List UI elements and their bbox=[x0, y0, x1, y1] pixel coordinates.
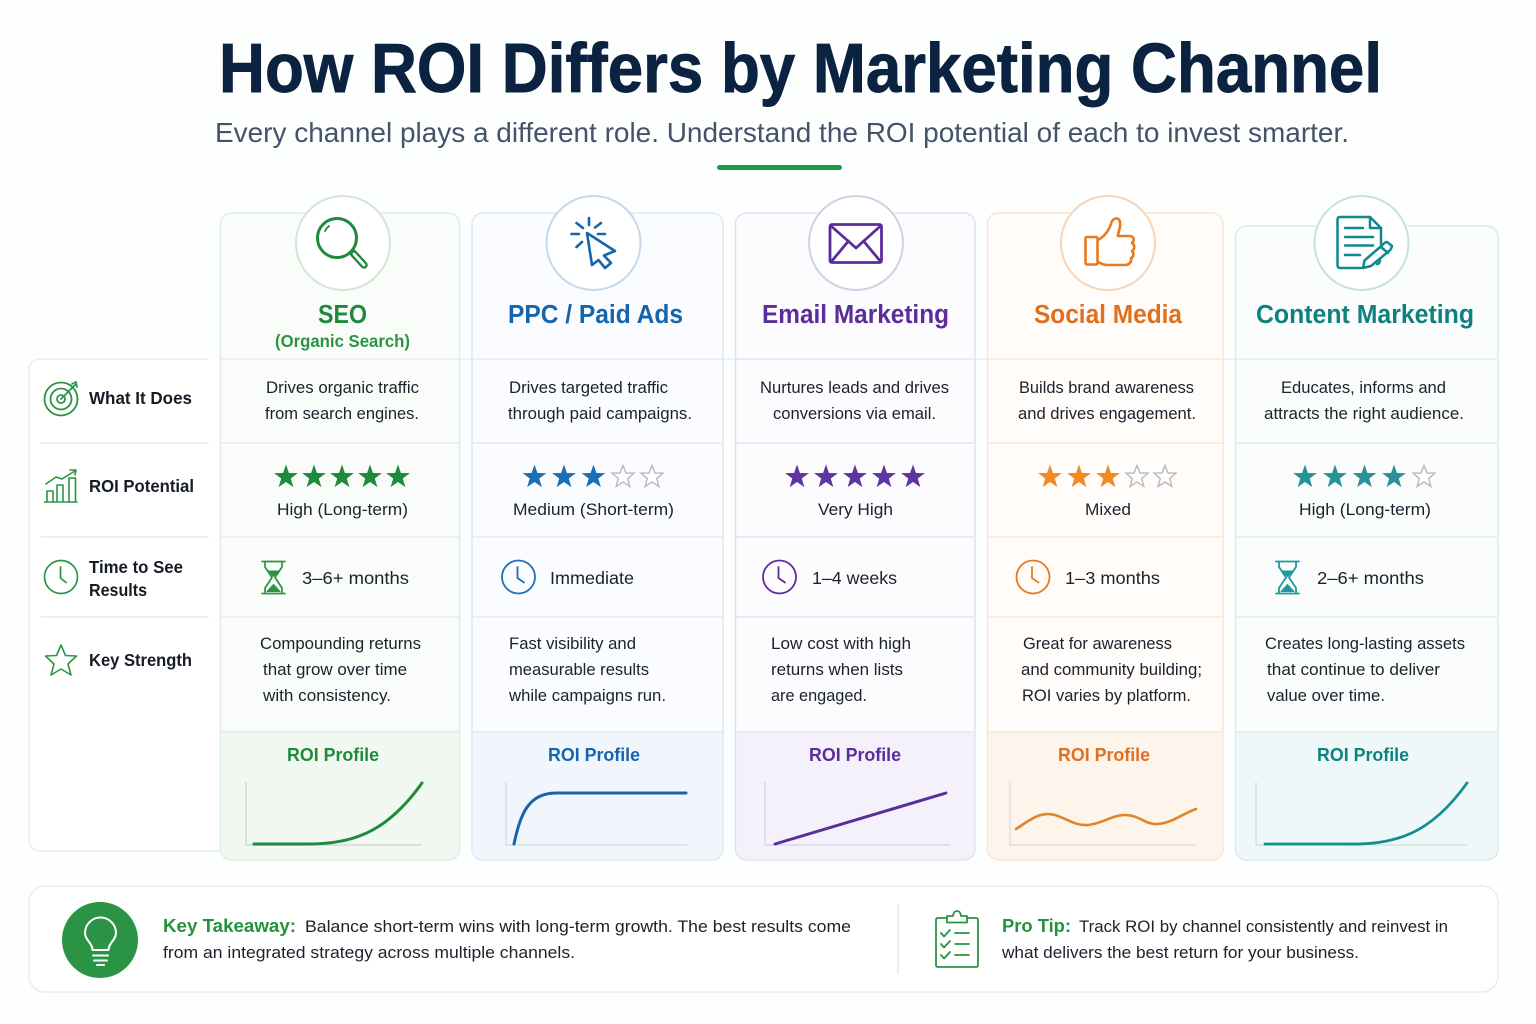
text: what it does: Drives organic traffic bbox=[266, 379, 419, 397]
time to results: 3–6+ months bbox=[302, 568, 409, 588]
ROI profile title: ROI Profile bbox=[1058, 744, 1150, 765]
text: key strength: while campaigns run. bbox=[508, 687, 666, 705]
text: key strength: that grow over time bbox=[263, 661, 407, 679]
text: what it does: from search engines. bbox=[265, 405, 419, 423]
text: key strength bbox=[1265, 635, 1465, 705]
icon: growth chart bbox=[44, 470, 77, 502]
ROI profile title: ROI Profile bbox=[809, 744, 901, 765]
text: key takeaway: Key Takeaway: bbox=[163, 915, 296, 936]
text: what it does: Builds brand awareness bbox=[1019, 379, 1194, 397]
heading: Email Marketing: Email Marketing bbox=[762, 301, 949, 329]
heading: SEO bbox=[275, 301, 410, 351]
text: key takeaway: Balance short-term wins with long-term growth. The best results come bbox=[305, 918, 851, 936]
text: what it does: attracts the right audience. bbox=[1264, 405, 1464, 423]
text: key strength: Creates long-lasting assets bbox=[1265, 635, 1465, 653]
icon: document and pencil bbox=[1314, 196, 1408, 290]
text: what it does: Nurtures leads and drives bbox=[760, 379, 949, 397]
title: How ROI Differs by Marketing Channel bbox=[219, 29, 1382, 107]
row label: What It Does bbox=[44, 382, 192, 416]
panel: Social Media bbox=[988, 196, 1223, 860]
panel: Email Marketing bbox=[736, 196, 975, 860]
text: what it does: Educates, informs and bbox=[1281, 379, 1446, 397]
icon: thumbs up bbox=[1061, 196, 1155, 290]
text: key takeaway bbox=[163, 915, 851, 962]
row label: Time to See Results bbox=[44, 557, 183, 600]
icon: light bulb bbox=[62, 902, 138, 978]
text: what it does bbox=[760, 379, 949, 423]
rating: four of five stars bbox=[1293, 464, 1435, 487]
text: key strength: ROI varies by platform. bbox=[1022, 687, 1191, 705]
rating label: Very High bbox=[818, 501, 893, 519]
icon: target bbox=[44, 382, 78, 416]
heading: Social Media: Social Media bbox=[1034, 301, 1183, 329]
ROI profile title: ROI Profile bbox=[548, 744, 640, 765]
row label: What It Does: What It Does bbox=[89, 388, 192, 408]
text: key strength: Great for awareness bbox=[1023, 635, 1172, 653]
text: key strength: measurable results bbox=[509, 661, 649, 679]
time to results: 1–4 weeks bbox=[812, 568, 897, 588]
chart: ROI profile curve bbox=[506, 782, 687, 845]
text: key strength: Fast visibility and bbox=[509, 635, 636, 653]
ROI profile title: ROI Profile bbox=[1317, 744, 1409, 765]
icon: clock bbox=[502, 560, 535, 594]
rating: three of five stars bbox=[1038, 464, 1176, 487]
text: key takeaway: from an integrated strategy across multiple channels. bbox=[163, 944, 575, 962]
text: key strength: returns when lists bbox=[771, 661, 903, 679]
text: key strength bbox=[260, 635, 421, 705]
panel: Content Marketing bbox=[1236, 196, 1498, 860]
icon: magnifying glass bbox=[296, 196, 390, 290]
icon: clock bbox=[763, 560, 796, 594]
panel: takeaway bar bbox=[29, 886, 1498, 992]
row label: Time to See Results: Time to See bbox=[89, 557, 183, 577]
text: pro tip: Track ROI by channel consistently and reinvest in bbox=[1079, 918, 1448, 936]
subtitle: Every channel plays a different role. Understand the ROI potential of each to invest smarter. bbox=[215, 117, 1349, 148]
text: key strength: value over time. bbox=[1267, 687, 1385, 705]
row label: ROI Potential bbox=[44, 470, 194, 502]
row label: Key Strength bbox=[46, 645, 192, 675]
text: key strength: that continue to deliver bbox=[1267, 661, 1441, 679]
ROI profile title: ROI Profile bbox=[287, 744, 379, 765]
text: key strength: are engaged. bbox=[771, 687, 867, 705]
text: key strength: and community building; bbox=[1021, 661, 1202, 679]
text: key strength bbox=[1021, 635, 1202, 705]
time to results: 2–6+ months bbox=[1317, 568, 1424, 588]
heading: SEO: (Organic Search) bbox=[275, 331, 410, 351]
text: what it does: through paid campaigns. bbox=[508, 405, 692, 423]
time to results: Immediate bbox=[550, 568, 634, 588]
text: what it does bbox=[508, 379, 692, 423]
rating label: High (Long-term) bbox=[277, 501, 408, 519]
text: key strength bbox=[508, 635, 666, 705]
text: what it does: Drives targeted traffic bbox=[509, 379, 668, 397]
rating label: Medium (Short-term) bbox=[513, 501, 674, 519]
chart: ROI profile line bbox=[765, 782, 950, 845]
row label: Time to See Results: Results bbox=[89, 580, 147, 600]
icon: hourglass bbox=[1276, 562, 1299, 594]
heading: PPC / Paid Ads: PPC / Paid Ads bbox=[508, 301, 683, 329]
rating label: High (Long-term) bbox=[1299, 501, 1431, 519]
text: what it does bbox=[1018, 379, 1196, 423]
chart: ROI profile wave bbox=[1010, 782, 1196, 845]
chart: ROI profile curve bbox=[246, 782, 422, 845]
rating: five stars bbox=[274, 464, 410, 487]
icon: star outline bbox=[46, 645, 76, 675]
title underline bbox=[717, 165, 842, 170]
icon: clock bbox=[44, 560, 78, 594]
heading: SEO: SEO bbox=[318, 301, 367, 329]
icon: hourglass bbox=[262, 562, 285, 594]
text: key strength: with consistency. bbox=[262, 687, 391, 705]
rating: three of five stars bbox=[523, 464, 663, 487]
icon: envelope bbox=[809, 196, 903, 290]
row label: Key Strength: Key Strength bbox=[89, 650, 192, 670]
text: what it does bbox=[265, 379, 419, 423]
panel: SEO bbox=[220, 196, 460, 860]
text: what it does bbox=[1264, 379, 1464, 423]
text: what it does: conversions via email. bbox=[773, 405, 936, 423]
panel: PPC / Paid Ads bbox=[472, 196, 723, 860]
text: pro tip: what delivers the best return for your business. bbox=[1001, 944, 1359, 962]
chart: ROI profile curve bbox=[1256, 782, 1467, 845]
heading: Content Marketing: Content Marketing bbox=[1256, 301, 1474, 329]
text: pro tip bbox=[1001, 915, 1448, 962]
panel: row labels bbox=[29, 358, 259, 851]
rating label: Mixed bbox=[1085, 501, 1131, 519]
text: pro tip: Pro Tip: bbox=[1002, 915, 1071, 936]
row label: ROI Potential: ROI Potential bbox=[89, 476, 194, 496]
text: key strength: Low cost with high bbox=[771, 635, 911, 653]
time to results: 1–3 months bbox=[1065, 568, 1160, 588]
text: key strength bbox=[771, 635, 911, 705]
text: key strength: Compounding returns bbox=[260, 635, 421, 653]
rating: five stars bbox=[785, 464, 925, 487]
icon: checklist clipboard bbox=[936, 911, 978, 967]
text: what it does: and drives engagement. bbox=[1018, 405, 1196, 423]
icon: clock bbox=[1016, 560, 1050, 594]
icon: cursor click bbox=[546, 196, 640, 290]
